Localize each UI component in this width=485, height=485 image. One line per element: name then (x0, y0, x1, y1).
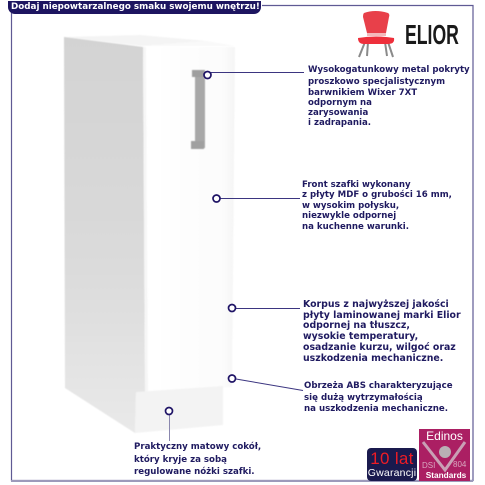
text: edge description: się dużą wytrzymałością (304, 392, 423, 402)
text: handle description: odpornym na (308, 98, 372, 108)
badge: Edinos standards: Standards (426, 470, 467, 480)
cabinet (64, 35, 235, 433)
marker: edge (228, 375, 236, 382)
badge: Edinos standards (419, 429, 470, 481)
text: front description: w wysokim połysku, (302, 201, 399, 211)
text: body description: płyty laminowanej marki Elior (303, 310, 461, 321)
text: handle description: zarysowania (308, 108, 368, 118)
text: handle description: proszkowo specjalistycznym (308, 77, 445, 87)
text: front description (302, 180, 452, 232)
brand name: ELIOR (405, 19, 459, 50)
text: edge description: na uszkodzenia mechaniczne. (304, 404, 448, 414)
text: handle description (308, 65, 470, 128)
badge: 10 year warranty: 10 lat (370, 449, 414, 468)
text: plinth description: Praktyczny matowy cokół, (134, 442, 261, 452)
text: plinth description (134, 442, 261, 477)
text: body description: odpornej na tłuszcz, (303, 320, 410, 331)
handle (191, 70, 205, 149)
text: edge description: Obrzeża ABS charakteryzujące (304, 381, 453, 391)
connector lines (170, 72, 304, 441)
text: body description (303, 299, 461, 364)
badge: Edinos standards: DSI (422, 461, 435, 470)
text: edge description (304, 381, 453, 414)
badge: 10 year warranty: Gwarancji (368, 467, 416, 479)
text: handle description: Wysokogatunkowy metal pokryty (308, 65, 470, 75)
text: front description: na kuchenne warunki. (302, 222, 409, 232)
title banner: Dodaj niepowtarzalnego smaku swojemu wnętrzu! (11, 2, 260, 12)
text: handle description: barwnikiem Wixer 7XT (308, 88, 417, 98)
text: plinth description: który kryje za sobą (134, 454, 227, 464)
text: front description: z płyty MDF o grubości 16 mm, (302, 190, 452, 200)
icon: red chair logo (358, 11, 394, 58)
text: front description: niezwykle odpornej (302, 211, 396, 221)
marker: front (213, 195, 220, 202)
text: body description: uszkodzenia mechaniczne. (303, 353, 443, 364)
text: body description: wysokie temperatury, (303, 331, 418, 342)
marker: body (228, 304, 236, 312)
text: plinth description: regulowane nóżki szafki. (134, 467, 255, 477)
badge: Edinos standards: 804 (453, 460, 467, 469)
text: body description: osadzanie kurzu, wilgoć oraz (303, 342, 456, 353)
text: front description: Front szafki wykonany (302, 180, 411, 190)
badge: 10 year warranty (367, 448, 417, 481)
marker: handle (204, 72, 211, 78)
text: body description: Korpus z najwyższej jakości (303, 299, 449, 310)
text: handle description: i zadrapania. (308, 118, 371, 128)
marker: plinth (166, 408, 172, 414)
badge: Edinos standards: Edinos (426, 429, 463, 443)
